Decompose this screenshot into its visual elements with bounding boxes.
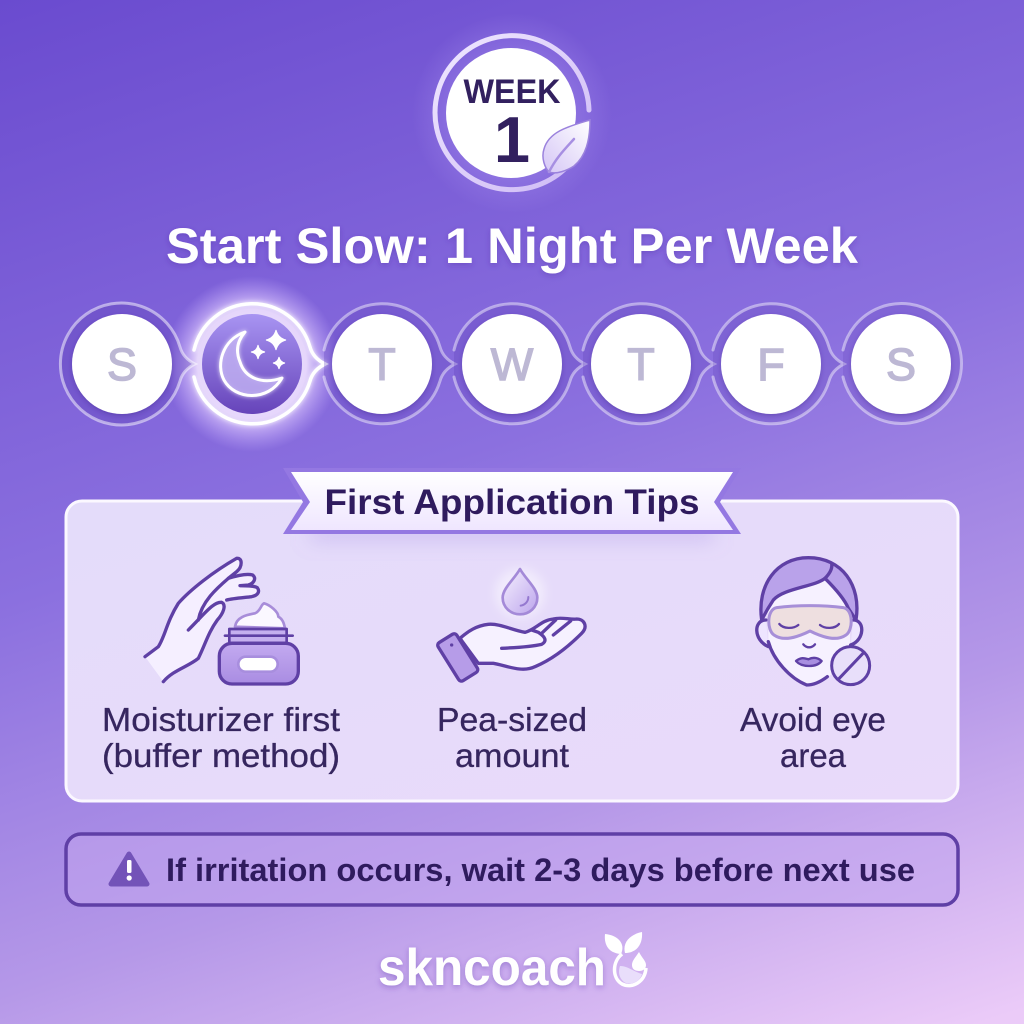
icon: crescent moon [221,332,282,396]
week badge [412,13,612,213]
icon: leaf [543,120,590,173]
moon glow [164,276,340,452]
label: amount [455,737,569,774]
label: Moisturizer first [102,701,340,738]
ribbon heading: First Application Tips [324,483,700,522]
day: Tuesday [324,304,455,424]
icon: face with eye mask and prohibition [757,558,870,685]
day: Thursday [583,304,714,424]
icon: warning triangle [111,854,147,884]
badge outer ring [435,36,589,190]
badge number: 1 [494,103,530,176]
week day selector [60,276,961,452]
tip: avoid eye area [740,558,886,774]
label: Avoid eye [740,701,886,738]
day: Friday [713,304,844,424]
title: Start Slow: 1 Night Per Week [166,218,858,274]
day: Saturday: S [886,339,916,390]
badge label: WEEK [464,73,561,111]
day: Saturday [843,304,961,423]
panel: first application tips [66,468,958,801]
day: Sunday [60,303,195,425]
tip: pea-sized amount [437,568,587,774]
day: Thursday: T [627,339,655,390]
icon: hand and cream jar [145,558,298,684]
icon: stars [251,330,286,369]
icon: drop over open hand [437,568,585,682]
icon: sprout and droplet [605,932,646,986]
ribbon heading [283,468,741,540]
day: Wednesday [454,304,585,424]
day: Tuesday: T [368,339,396,390]
day: Monday active [194,304,325,424]
logo [378,932,646,997]
wordmark: skncoach [378,939,606,997]
day: Wednesday: W [491,339,534,390]
tip: moisturizer first [102,558,340,774]
badge white disc [446,48,576,178]
day: Friday: F [757,339,785,390]
label: Pea-sized [437,701,587,738]
warning text: If irritation occurs, wait 2-3 days before next use [166,852,915,888]
label: area [780,737,847,774]
day: Sunday: S [107,339,137,390]
callout: irritation warning [66,834,958,905]
label: (buffer method) [102,737,340,774]
